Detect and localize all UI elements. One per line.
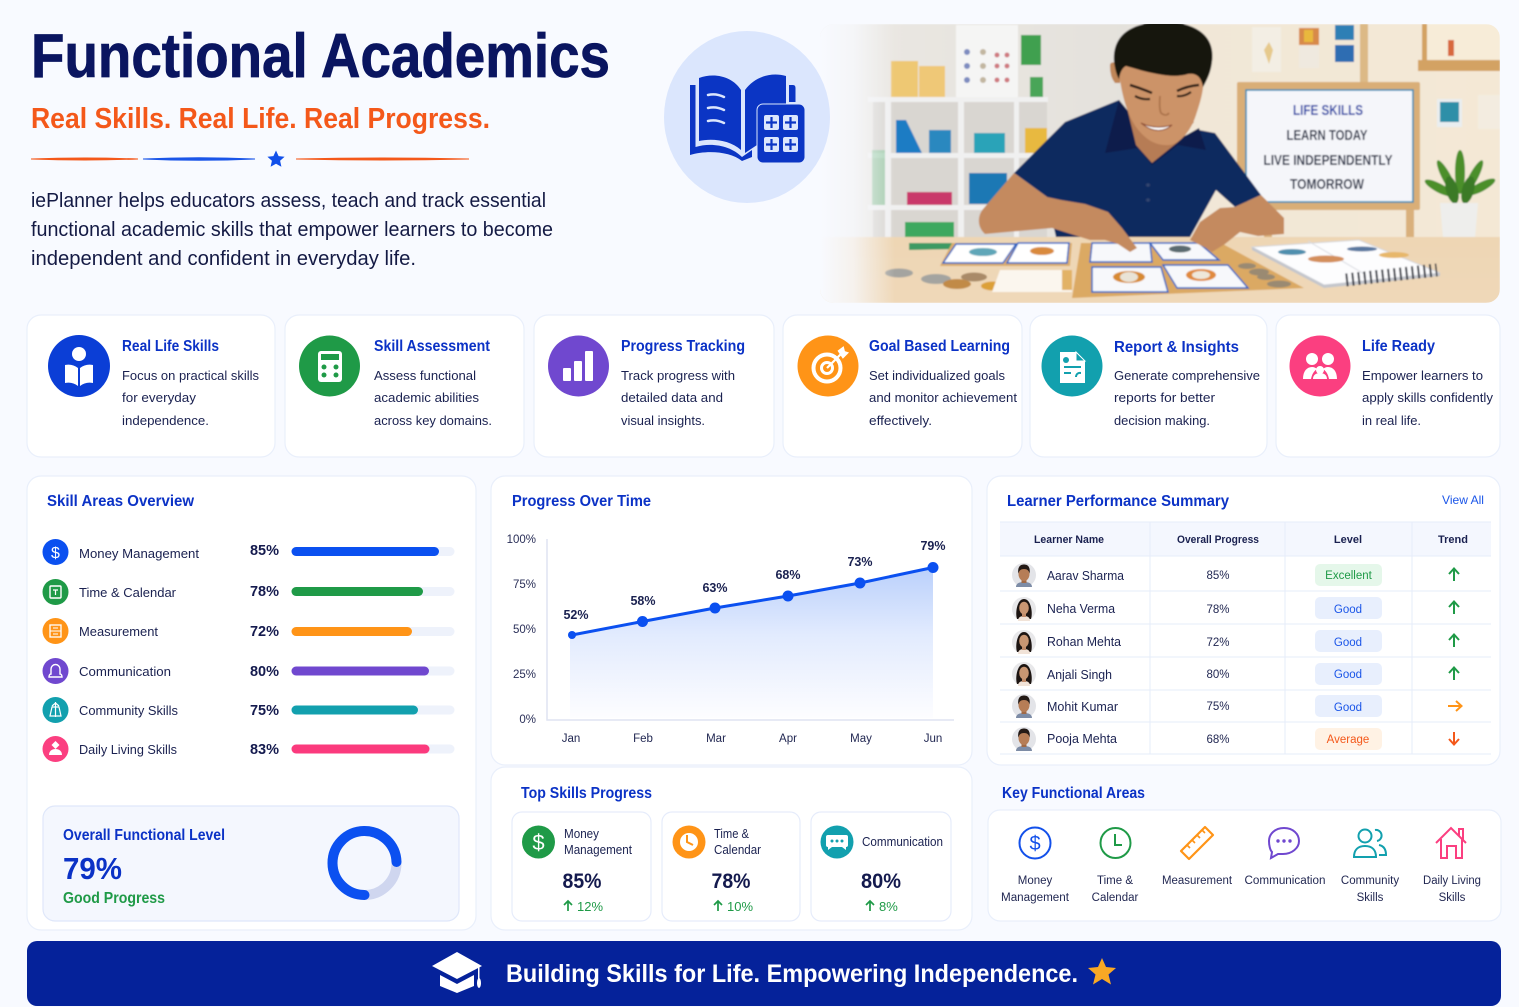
table top xyxy=(820,237,1500,303)
footer banner xyxy=(27,941,1501,1006)
icon: report document xyxy=(1042,336,1102,396)
icon: house: Skills xyxy=(1439,892,1466,904)
icon: money: Money xyxy=(1018,875,1053,887)
line chart: 79% xyxy=(920,539,946,553)
line chart: 50% xyxy=(513,624,536,636)
feature card: Skill Assessment: Skill Assessment xyxy=(374,338,491,355)
feature card: Goal Based Learning xyxy=(783,315,1022,457)
intro paragraph: iePlanner helps educators assess, teach and track essential xyxy=(31,189,546,212)
icon: money: Management xyxy=(1001,892,1070,904)
icon: people xyxy=(1290,336,1350,396)
feature card: Life Ready: in real life. xyxy=(1362,413,1421,428)
feature card: Report & Insights: reports for better xyxy=(1114,390,1216,405)
feature card: Report & Insights xyxy=(1030,315,1267,457)
line chart xyxy=(507,534,954,745)
feature card: Life Ready: apply skills confidently xyxy=(1362,390,1494,405)
intro paragraph xyxy=(31,189,553,270)
table: Learner Name xyxy=(1034,534,1104,546)
row: Rohan Mehta: 72% xyxy=(1206,637,1230,649)
whiteboard with message xyxy=(1237,82,1420,239)
line chart: Jun xyxy=(924,733,942,745)
row: Rohan Mehta xyxy=(1012,630,1459,654)
row: Pooja Mehta: 68% xyxy=(1206,734,1230,746)
line chart: 75% xyxy=(513,579,536,591)
feature card: Skill Assessment xyxy=(285,315,524,457)
icon: ruler: Measurement xyxy=(1162,875,1233,887)
feature card: Real Life Skills: Real Life Skills xyxy=(122,338,219,355)
callout: overall functional level: 79% xyxy=(63,851,122,886)
notebook xyxy=(1252,240,1440,288)
row: Neha Verma: 78% xyxy=(1206,604,1230,616)
skill row: Measurement: 72% xyxy=(250,623,279,640)
skill card: Money Management: 12% xyxy=(577,899,603,914)
icon: money xyxy=(1001,828,1070,904)
skill row: Measurement xyxy=(42,618,454,644)
skill row: Time & Calendar: Time & Calendar xyxy=(79,585,177,600)
skill row: Daily Living Skills xyxy=(42,736,454,762)
row: Anjali Singh xyxy=(1012,662,1459,686)
row: Mohit Kumar: 75% xyxy=(1206,701,1230,713)
skill row: Community Skills xyxy=(42,697,454,723)
table: Trend xyxy=(1438,534,1468,546)
icon: money: $ xyxy=(1029,833,1041,855)
line chart: 0% xyxy=(519,714,536,726)
skill card: Communication: Communication xyxy=(862,834,943,849)
row: Rohan Mehta: Good xyxy=(1334,637,1362,649)
icon: house xyxy=(1423,828,1481,904)
skill row: Money Management: 85% xyxy=(250,542,279,559)
row: Anjali Singh: 80% xyxy=(1206,669,1230,681)
icon: ruler xyxy=(1162,827,1233,887)
panel: skill areas overview xyxy=(27,476,476,930)
feature card: Report & Insights: decision making. xyxy=(1114,413,1210,428)
feature card: Report & Insights: Report & Insights xyxy=(1114,339,1239,356)
skill row: Measurement: Measurement xyxy=(79,624,158,639)
skill card: Money Management: $ xyxy=(532,830,545,855)
icon: calculator xyxy=(299,336,360,396)
callout: overall functional level: Good Progress xyxy=(63,890,165,907)
callout: overall functional level xyxy=(43,806,459,921)
line chart: May xyxy=(850,733,872,745)
icon: people outline xyxy=(1341,830,1399,904)
panel: learner performance summary xyxy=(987,476,1500,765)
row: Rohan Mehta: Rohan Mehta xyxy=(1047,634,1122,649)
row: Pooja Mehta: Pooja Mehta xyxy=(1047,731,1118,746)
boy's arms and hands xyxy=(979,173,1284,252)
skill row: Time & Calendar xyxy=(42,579,454,605)
feature card: Progress Tracking: visual insights. xyxy=(621,413,705,428)
intro paragraph: independent and confident in everyday life. xyxy=(31,247,416,270)
row: Mohit Kumar xyxy=(1012,694,1462,718)
skill card: Money Management xyxy=(512,812,651,921)
feature card: Report & Insights: Generate comprehensive xyxy=(1114,368,1260,383)
feature card: Progress Tracking: Track progress with xyxy=(621,368,735,383)
heading: Top Skills Progress xyxy=(521,785,652,802)
panel: key functional areas xyxy=(988,810,1501,921)
line chart: 25% xyxy=(513,669,536,681)
line chart: 52% xyxy=(563,608,589,622)
row: Mohit Kumar: Mohit Kumar xyxy=(1047,699,1119,714)
subtitle: Real Skills. Real Life. Real Progress. xyxy=(31,103,490,135)
intro paragraph: functional academic skills that empower learners to become xyxy=(31,218,553,241)
feature card: Skill Assessment: academic abilities xyxy=(374,390,480,405)
icon: people outline: Skills xyxy=(1357,892,1384,904)
icon: speech bubble: Communication xyxy=(1244,875,1326,887)
photo left fade xyxy=(820,24,895,303)
skill card: Time & Calendar: 10% xyxy=(727,899,753,914)
skill row: Communication: 80% xyxy=(250,663,279,680)
heading: Progress Over Time xyxy=(512,493,651,510)
feature card: Skill Assessment: across key domains. xyxy=(374,413,492,428)
skill row: Money Management: Money Management xyxy=(79,546,199,561)
whiteboard with message: TOMORROW xyxy=(1290,176,1365,193)
skill card: Money Management: 85% xyxy=(562,870,602,893)
skill row: Daily Living Skills: Daily Living Skills xyxy=(79,742,177,757)
row: Neha Verma xyxy=(1012,597,1459,621)
skill card: Communication: 80% xyxy=(861,870,901,893)
skill card: Money Management: Management xyxy=(564,842,632,857)
feature card: Real Life Skills xyxy=(27,315,275,457)
feature card: Goal Based Learning: Set individualized goals xyxy=(869,368,1005,383)
feature card: Real Life Skills: for everyday xyxy=(122,390,197,405)
skill row: Communication: Communication xyxy=(79,664,171,679)
icon: reader xyxy=(48,335,110,397)
skill card: Time & Calendar xyxy=(662,812,800,921)
line chart: Feb xyxy=(633,733,653,745)
icon: people outline: Community xyxy=(1341,875,1399,887)
row: Anjali Singh: Anjali Singh xyxy=(1047,667,1112,682)
row: Neha Verma: Neha Verma xyxy=(1047,601,1116,616)
feature card: Skill Assessment: Assess functional xyxy=(374,368,476,383)
feature card: Progress Tracking: Progress Tracking xyxy=(621,338,745,355)
icon: bar chart xyxy=(548,336,609,396)
icon: book and calculator badge xyxy=(664,31,830,203)
shelf unit with storage xyxy=(868,25,1048,237)
donut chart 79% xyxy=(332,831,396,895)
skill card: Time & Calendar: 78% xyxy=(712,870,751,893)
row: Anjali Singh: Good xyxy=(1334,669,1362,681)
divider with star xyxy=(31,150,469,167)
line chart: 58% xyxy=(630,594,656,608)
title: Functional Academics xyxy=(31,22,610,91)
icon: star xyxy=(1088,958,1116,984)
feature card: Goal Based Learning: Goal Based Learning xyxy=(869,338,1010,355)
feature card: Progress Tracking xyxy=(534,315,774,457)
skill row: Communication xyxy=(42,658,454,684)
skill card: Money Management: Money xyxy=(564,826,599,841)
panel: top skills progress xyxy=(491,767,972,930)
line chart: Mar xyxy=(706,733,726,745)
skill row: Community Skills: Community Skills xyxy=(79,703,178,718)
skill row: Time & Calendar: 78% xyxy=(250,583,279,600)
icon: clock xyxy=(1092,828,1139,904)
feature card: Goal Based Learning: effectively. xyxy=(869,413,932,428)
row: Pooja Mehta xyxy=(1012,727,1459,751)
skill card: Communication xyxy=(811,812,951,921)
banner text: Building Skills for Life. Empowering Independence. xyxy=(506,960,1078,988)
feature card: Real Life Skills: independence. xyxy=(122,413,209,428)
feature card: Life Ready xyxy=(1276,315,1500,457)
icon: graduation cap xyxy=(432,952,482,993)
skill card: Time & Calendar: Calendar xyxy=(714,842,762,857)
skill card: Time & Calendar: Time & xyxy=(714,826,749,841)
table: Level xyxy=(1334,534,1362,546)
wall posters and frames xyxy=(1252,24,1500,129)
icon: target xyxy=(798,336,858,396)
skill card: Communication: 8% xyxy=(879,899,898,914)
table xyxy=(1000,522,1491,754)
line chart: Jan xyxy=(562,733,580,745)
boy xyxy=(1014,22,1261,237)
hero photo: boy using life skills cards xyxy=(820,22,1500,303)
icon: clock: Time & xyxy=(1097,875,1133,887)
line chart: 73% xyxy=(847,555,873,569)
row: Aarav Sharma: 85% xyxy=(1206,570,1230,582)
row: Aarav Sharma: Excellent xyxy=(1325,570,1373,582)
skill row: Money Management xyxy=(42,539,454,565)
line chart: 68% xyxy=(775,568,801,582)
line chart: 100% xyxy=(507,534,536,546)
feature card: Progress Tracking: detailed data and xyxy=(621,390,723,405)
coins and game cards xyxy=(885,243,1304,298)
row: Pooja Mehta: Average xyxy=(1327,734,1369,746)
heading: Skill Areas Overview xyxy=(47,493,195,510)
line chart: Apr xyxy=(779,733,797,745)
heading: Learner Performance Summary xyxy=(1007,493,1229,510)
row: Mohit Kumar: Good xyxy=(1334,702,1362,714)
feature card: Real Life Skills: Focus on practical skills xyxy=(122,368,259,383)
line chart: 63% xyxy=(702,581,728,595)
icon: speech bubble xyxy=(1244,828,1326,887)
table: Overall Progress xyxy=(1177,534,1259,546)
heading: key functional areas: Key Functional Areas xyxy=(1002,785,1145,802)
panel: progress over time xyxy=(491,476,972,765)
link: view all: View All xyxy=(1442,493,1484,507)
feature card: Goal Based Learning: and monitor achievement xyxy=(869,390,1017,405)
skill row: Money Management: $ xyxy=(51,545,60,562)
row: Neha Verma: Good xyxy=(1334,604,1362,616)
row: Aarav Sharma: Aarav Sharma xyxy=(1047,568,1125,583)
feature card: Life Ready: Empower learners to xyxy=(1362,368,1483,383)
feature card: Life Ready: Life Ready xyxy=(1362,338,1435,355)
icon: house: Daily Living xyxy=(1423,875,1481,887)
skill row: Community Skills: 75% xyxy=(250,702,279,719)
icon: clock: Calendar xyxy=(1092,892,1139,904)
whiteboard with message: LIFE SKILLS xyxy=(1293,102,1363,119)
row: Aarav Sharma xyxy=(1012,563,1459,587)
potted plant xyxy=(1423,150,1497,238)
skill row: Daily Living Skills: 83% xyxy=(250,741,279,758)
whiteboard with message: LIVE INDEPENDENTLY xyxy=(1264,152,1392,169)
whiteboard with message: LEARN TODAY xyxy=(1286,127,1368,144)
callout: overall functional level: Overall Functional Level xyxy=(63,827,225,844)
